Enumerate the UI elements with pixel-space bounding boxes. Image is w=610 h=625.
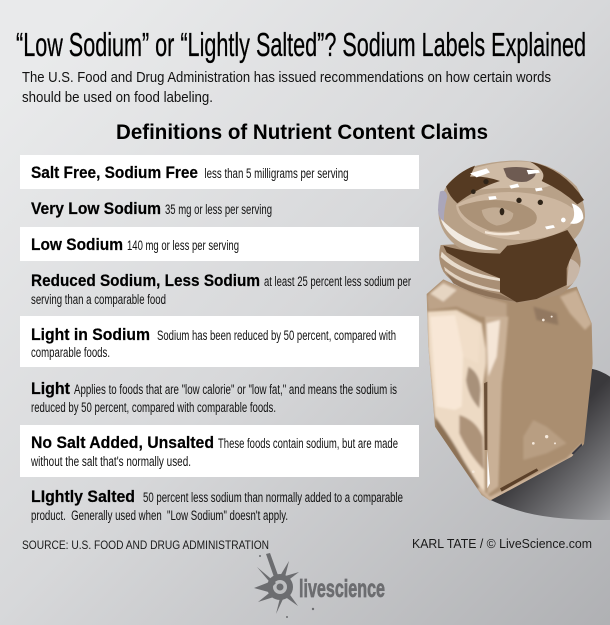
- row: lightly salted: product. Generally used when "Low Sodium" doesn't apply.: [31, 508, 288, 523]
- row: salt free: Salt Free, Sodium Free: [31, 164, 198, 182]
- row: light in sodium: [20, 316, 419, 367]
- row: light in sodium: comparable foods.: [31, 345, 110, 360]
- intro text: should be used on food labeling.: [22, 89, 213, 106]
- row: very low sodium: Very Low Sodium: [31, 200, 161, 218]
- row: light in sodium: Light in Sodium: [31, 326, 150, 344]
- heading: Definitions of Nutrient Content Claims: [116, 121, 488, 144]
- row: light: Applies to foods that are "low calorie" or "low fat," and means the sodium is: [74, 382, 397, 397]
- dome: [438, 161, 585, 255]
- row: salt free: [20, 155, 419, 189]
- centre ridge: [485, 317, 508, 495]
- top dark crescents: [446, 166, 500, 203]
- row: low sodium: 140 mg or less per serving: [127, 238, 239, 253]
- threads: [439, 238, 581, 303]
- row: light: Light: [31, 380, 70, 398]
- intro text: [22, 69, 551, 106]
- left face cream: [427, 310, 487, 493]
- source credit: SOURCE: U.S. FOOD AND DRUG ADMINISTRATION: [22, 538, 269, 552]
- logo wordmark: livescience: [299, 575, 385, 603]
- row: lightly salted: 50 percent less sodium than normally added to a comparable: [143, 490, 403, 505]
- row: salt free: less than 5 milligrams per serving: [204, 166, 348, 181]
- upper shoulder: [427, 280, 507, 320]
- row: light: reduced by 50 percent, compared with comparable foods.: [31, 400, 276, 415]
- row: reduced sodium: [31, 272, 411, 307]
- logo splat: [254, 553, 314, 618]
- row: reduced sodium: Reduced Sodium, Less Sodium: [31, 272, 260, 290]
- ridge and base lines: [484, 382, 487, 450]
- shaker holes: [471, 179, 543, 215]
- row: lightly salted: LIghtly Salted: [31, 488, 135, 506]
- row: no salt added: These foods contain sodium, but are made: [218, 436, 398, 451]
- row: reduced sodium: at least 25 percent less sodium per: [264, 274, 411, 289]
- glass body: [427, 279, 593, 501]
- blotches: [466, 367, 481, 408]
- cap highlights: [470, 168, 566, 229]
- dark band: [443, 230, 577, 302]
- top ellipse: [456, 192, 577, 240]
- row: low sodium: [20, 227, 419, 261]
- row: no salt added: without the salt that's normally used.: [30, 454, 191, 469]
- author credit: KARL TATE / © LiveScience.com: [412, 536, 592, 551]
- row: low sodium: Low Sodium: [31, 236, 123, 254]
- row: no salt added: No Salt Added, Unsalted: [31, 434, 214, 452]
- row: light: [31, 380, 397, 415]
- salt shaker illustration: [427, 161, 610, 520]
- white rim highlight: [441, 218, 498, 250]
- row: lightly salted: [31, 488, 403, 523]
- row: very low sodium: 35 mg or less per serving: [165, 202, 272, 217]
- row: reduced sodium: serving than a comparable food: [31, 292, 166, 307]
- shaker shadow: [491, 368, 610, 520]
- livescience logo: [254, 553, 385, 618]
- metal cap: [438, 161, 585, 303]
- row: no salt added: [20, 425, 419, 477]
- row: light in sodium: Sodium has been reduced by 50 percent, compared with: [157, 328, 396, 343]
- row: very low sodium: [31, 200, 272, 218]
